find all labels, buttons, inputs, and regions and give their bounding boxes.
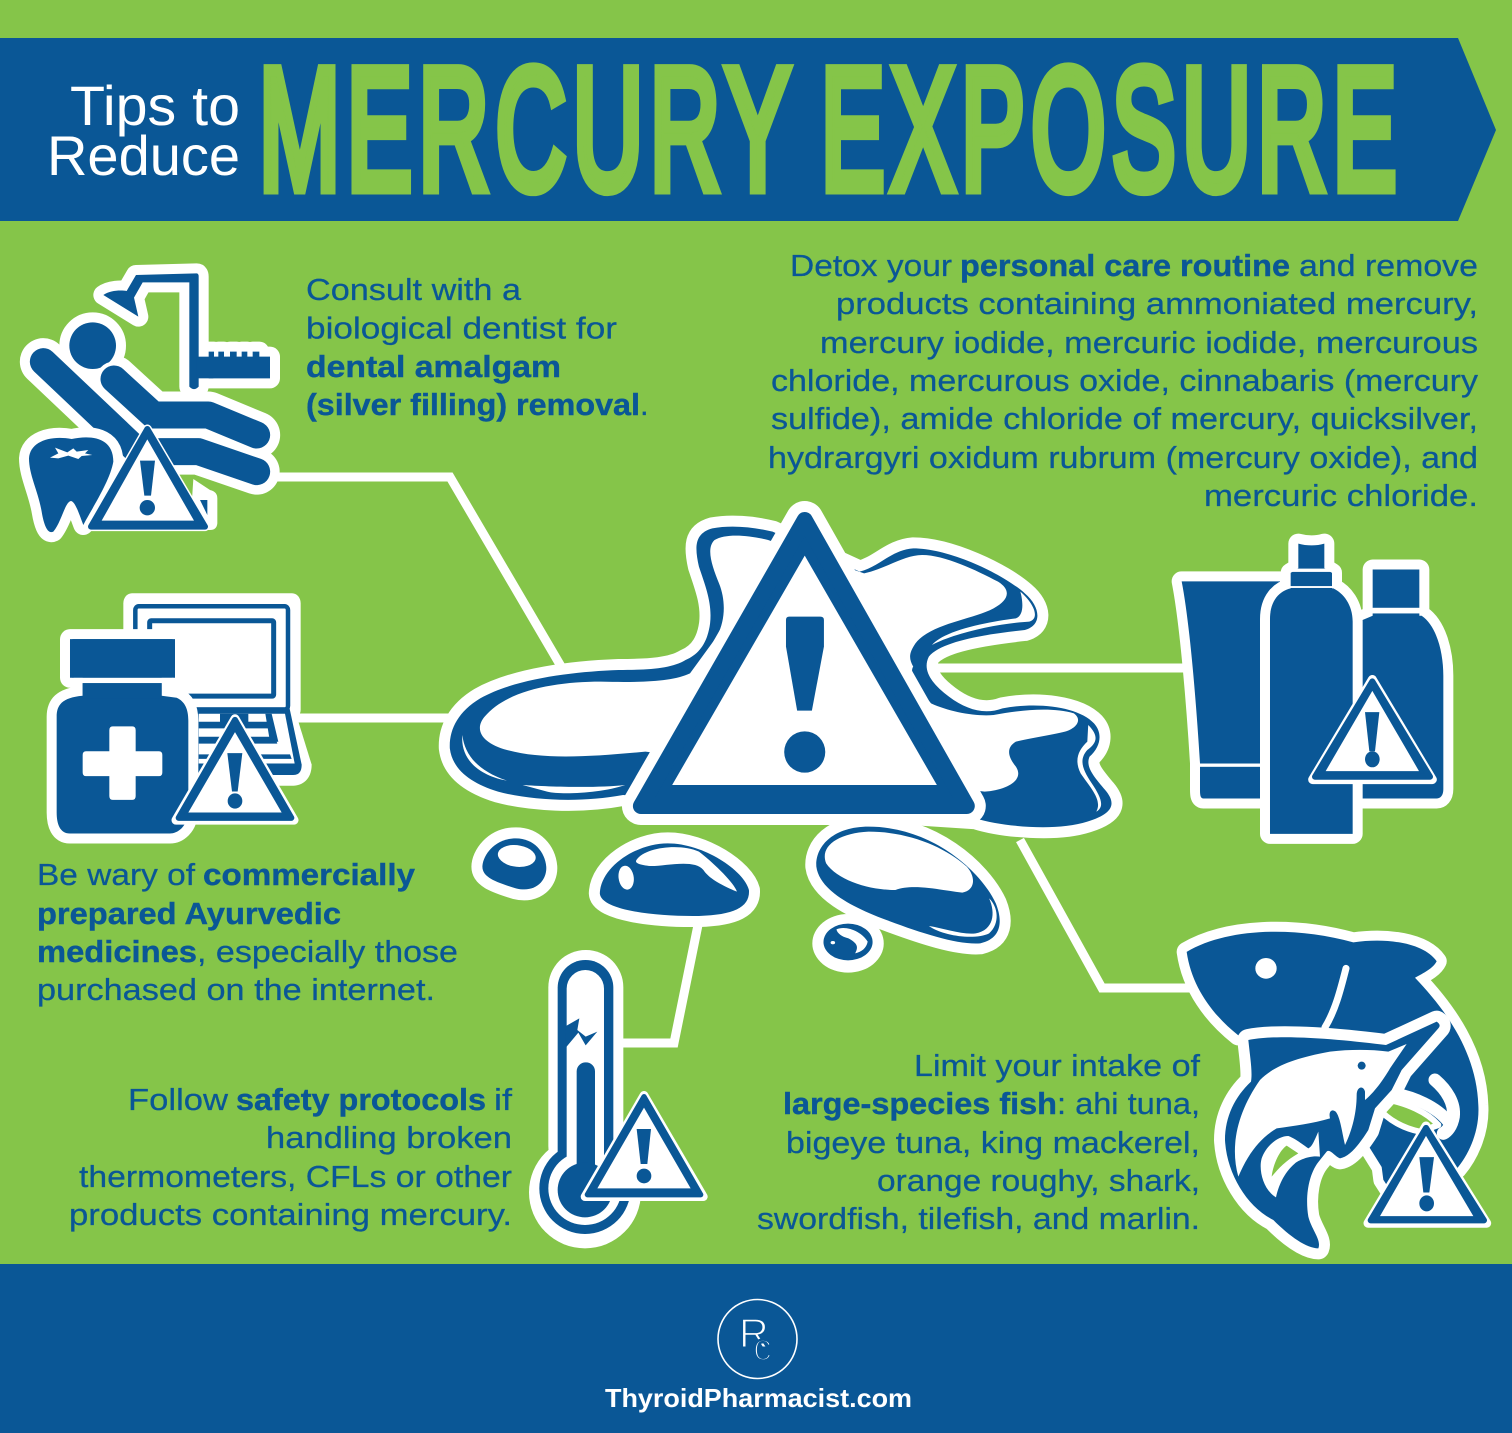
text block: large-species fish: bigeye tuna, king mackerel,	[786, 1125, 1200, 1160]
text block: dental amalgam: (silver filling) removal	[306, 387, 640, 422]
mercury droplet 3	[816, 827, 1000, 943]
warning triangle	[1313, 680, 1432, 780]
text block: personal care routine: chloride, mercurous oxide, cinnabaris (mercury	[771, 363, 1479, 398]
text block: dental amalgam: Consult with a	[306, 272, 522, 307]
warning triangle	[1368, 1126, 1487, 1223]
text block: large-species fish: large-species fish	[783, 1086, 1057, 1121]
thermometer	[529, 950, 641, 1248]
icon: medicine bottle and laptop	[57, 593, 312, 834]
tube	[1182, 581, 1280, 798]
text block: Ayurvedic medicines: medicines	[37, 934, 197, 969]
text block: personal care routine: sulfide), amide chloride of mercury, quicksilver,	[771, 401, 1478, 436]
text block: safety protocols: if	[494, 1082, 512, 1117]
warning triangle	[585, 1095, 703, 1197]
subtitle: Tips to Reduce	[47, 74, 240, 187]
text block: Ayurvedic medicines: , especially those	[197, 934, 458, 969]
text block: personal care routine: personal care routine	[960, 248, 1290, 283]
footer band	[0, 1264, 1512, 1433]
small bottle	[1353, 570, 1443, 798]
text block: personal care routine: hydrargyri oxidum rubrum (mercury oxide), and	[768, 440, 1478, 475]
text block: safety protocols: thermometers, CFLs or other	[79, 1159, 512, 1194]
spray bottle	[1270, 544, 1353, 834]
text block: large-species fish: swordfish, tilefish, and marlin.	[757, 1201, 1200, 1236]
text block: Ayurvedic medicines: purchased on the internet.	[37, 972, 435, 1007]
text block: personal care routine	[768, 248, 1479, 513]
text block: safety protocols: safety protocols	[236, 1082, 486, 1117]
text block: dental amalgam: .	[640, 387, 649, 422]
text block: Ayurvedic medicines: Be wary of	[37, 857, 195, 892]
website address: ThyroidPharmacist.com	[605, 1383, 912, 1413]
dental lamp and tray	[103, 273, 270, 389]
mercury droplet 4	[812, 914, 884, 973]
text block: personal care routine: and remove	[1299, 248, 1478, 283]
logo: RC monogram	[718, 1300, 797, 1378]
mercury droplet 1	[482, 838, 546, 889]
marlin	[1225, 1022, 1454, 1248]
text block: personal care routine: products containing ammoniated mercury,	[836, 286, 1478, 321]
text block: safety protocols	[69, 1082, 512, 1232]
text block: Ayurvedic medicines: prepared Ayurvedic	[37, 896, 341, 931]
laptop	[123, 593, 312, 786]
central warning triangle	[641, 520, 967, 806]
logo: RC monogram: R	[739, 1310, 769, 1356]
text block: large-species fish: orange roughy, shark,	[877, 1163, 1200, 1198]
medicine bottle	[57, 639, 188, 834]
text block: safety protocols: products containing mercury.	[69, 1197, 512, 1232]
text block: large-species fish: : ahi tuna,	[1057, 1086, 1200, 1121]
logo: RC monogram: c	[753, 1327, 772, 1369]
text block: Ayurvedic medicines: commercially	[203, 857, 416, 892]
text block: personal care routine: mercury iodide, mercuric iodide, mercurous	[820, 325, 1478, 360]
warning triangle	[176, 719, 294, 820]
mercury droplet 2	[600, 843, 749, 916]
shark body	[1187, 932, 1478, 1190]
text block: large-species fish	[757, 1048, 1200, 1236]
title: Mercury Exposure: MERCURY	[259, 34, 797, 226]
icon: personal care bottles	[1182, 544, 1443, 834]
text block: personal care routine: mercuric chloride.	[1204, 478, 1478, 513]
central mercury puddle with warning sign	[450, 520, 1112, 973]
tooth	[29, 437, 113, 532]
connector lines	[270, 477, 1195, 1043]
puddle	[450, 527, 1112, 827]
text block: dental amalgam	[306, 272, 649, 422]
icon: broken thermometer	[529, 950, 703, 1248]
header banner	[0, 34, 1496, 226]
icon: dentist chair and tooth	[29, 273, 270, 532]
text block: safety protocols: handling broken	[266, 1120, 512, 1155]
text block: safety protocols: Follow	[128, 1082, 229, 1117]
text block: dental amalgam: dental amalgam	[306, 349, 561, 384]
patient figure	[43, 322, 257, 472]
text block: dental amalgam: biological dentist for	[306, 310, 617, 346]
text block: Ayurvedic medicines	[37, 857, 458, 1007]
subtitle: Tips to Reduce: Tips to	[70, 74, 240, 137]
text block: personal care routine: Detox your	[790, 248, 952, 283]
icon: shark and marlin	[1187, 932, 1487, 1248]
text block: large-species fish: Limit your intake of	[914, 1048, 1200, 1083]
warning triangle	[91, 429, 205, 527]
subtitle: Tips to Reduce: Reduce	[47, 124, 240, 187]
